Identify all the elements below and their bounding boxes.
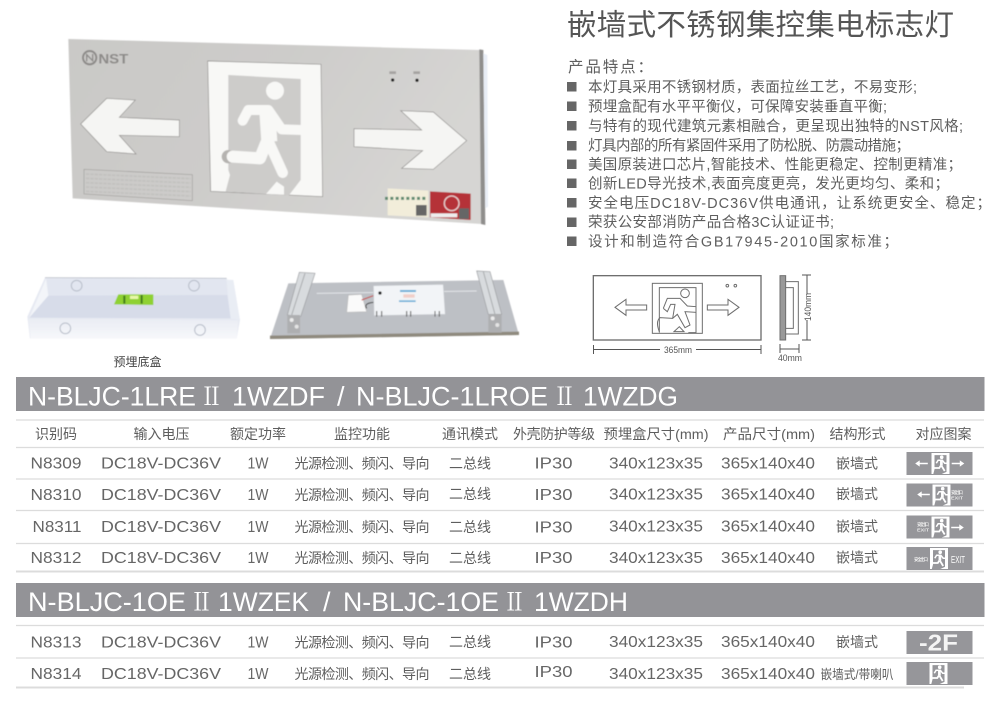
pattern icon N8311: EXIT: [917, 528, 929, 532]
row N8309: 365x140x40: [721, 456, 815, 472]
row N8313: 光源检测、频闪、导向: [294, 634, 430, 650]
row N8312: 340x123x35: [609, 550, 703, 567]
pattern icon N8310: [906, 484, 972, 506]
model header bar 2: /: [323, 587, 331, 617]
row N8309: 光源检测、频闪、导向: [294, 456, 430, 472]
row N8312: 光源检测、频闪、导向: [294, 550, 430, 566]
table header row: 预埋盒尺寸(mm): [604, 426, 708, 442]
row N8314: 365x140x40: [721, 666, 815, 683]
outline left arrow: [615, 299, 647, 315]
row N8309: [30, 452, 972, 475]
NST logo: NST: [98, 50, 129, 66]
feature 3: 与特有的现代建筑元素相融合，更呈现出独特的NST风格;: [588, 118, 963, 135]
row N8313: 1W: [248, 634, 269, 652]
indicator lights: [389, 71, 420, 82]
table header row: 外壳防护等级: [513, 426, 595, 442]
table header row: [35, 426, 972, 442]
row N8311: IP30: [534, 520, 573, 536]
row N8311: 嵌墙式: [836, 518, 878, 534]
row N8312: 嵌墙式: [836, 550, 878, 566]
pattern icon N8312: EXIT: [951, 555, 965, 566]
row N8313: DC18V-DC36V: [101, 634, 222, 652]
table header row: 对应图案: [916, 426, 972, 442]
pattern icon N8311: 安全出口: [917, 521, 930, 528]
row N8311: 365x140x40: [721, 518, 815, 536]
table header row: 输入电压: [134, 426, 190, 442]
model header bar 2: 1WZEK: [218, 587, 309, 617]
row N8312: 365x140x40: [721, 550, 815, 567]
pattern icon N8311: [906, 516, 972, 538]
feature 1: 本灯具采用不锈钢材质，表面拉丝工艺，不易变形;: [588, 79, 917, 96]
pattern icon N8310: EXIT: [951, 496, 963, 500]
model header bar 1: Ⅱ: [200, 377, 223, 413]
embedded base box photo with spirit level: [27, 278, 240, 338]
terminal block and wires: [347, 294, 373, 312]
row N8310: 340x123x35: [609, 486, 703, 504]
row N8309: IP30: [534, 456, 573, 472]
row N8312: 二总线: [449, 550, 491, 566]
row N8309: DC18V-DC36V: [101, 456, 222, 472]
model header bar 1: [16, 377, 984, 413]
model header bar 1: N-BLJC-1LROE: [356, 382, 548, 412]
row N8314: 光源检测、频闪、导向: [294, 666, 430, 682]
dimension line: 365mm width: [594, 345, 761, 356]
row N8314: DC18V-DC36V: [101, 666, 222, 683]
model header bar 2: N-BLJC-1OE: [28, 587, 186, 617]
model header bar 1: Ⅱ: [553, 377, 576, 413]
table rules: [16, 420, 984, 688]
lamp faceplate: [68, 39, 482, 224]
pattern icon N8310: 安全出口: [951, 489, 964, 496]
row N8312: 1W: [248, 550, 269, 567]
row N8311: [32, 516, 972, 538]
pattern icon: door only: [906, 662, 972, 685]
row N8311: 340x123x35: [609, 518, 703, 536]
model header bar 1: N-BLJC-1LRE: [28, 382, 196, 412]
row N8314: 二总线: [449, 666, 491, 682]
model header bar 2: N-BLJC-1OE: [343, 587, 499, 617]
row N8310: 1W: [248, 487, 269, 504]
row N8310: 嵌墙式: [836, 486, 878, 502]
row N8313: 嵌墙式: [836, 634, 878, 650]
feature 7: 安全电压DC18V-DC36V供电通讯，让系统更安全、稳定；: [588, 194, 991, 212]
row N8311: N8311: [32, 519, 82, 536]
back of lamp photo with driver module and brackets: [270, 271, 519, 339]
table header row: 监控功能: [334, 426, 390, 442]
outline right arrow: [707, 299, 739, 315]
dimension line: 140mm height: [802, 275, 814, 340]
pattern icon: -2F: [906, 630, 972, 656]
row N8309: N8309: [30, 456, 82, 472]
model header bar 1: 1WZDF: [232, 382, 325, 412]
outline exit symbol: [652, 283, 702, 333]
dimension line: 40mm depth: 40mm: [778, 353, 802, 364]
row N8313: 365x140x40: [721, 634, 815, 651]
row N8313: N8313: [30, 634, 82, 652]
row N8310: 二总线: [449, 486, 491, 502]
row N8311: 1W: [248, 519, 269, 536]
left bracket: [287, 272, 315, 333]
row N8312: [30, 547, 972, 570]
row N8313: 340x123x35: [609, 634, 703, 651]
feature 2: 预埋盒配有水平平衡仪，可保障安装垂直平衡;: [588, 98, 887, 116]
row N8313: IP30: [534, 634, 573, 652]
model header bar 2: Ⅱ: [190, 582, 213, 618]
dimension line: 365mm width: 365mm: [664, 345, 692, 356]
dimension drawing: side view: [780, 276, 798, 340]
row N8310: DC18V-DC36V: [101, 487, 222, 504]
left arrow: [81, 98, 179, 154]
right arrow: [354, 111, 467, 169]
feature 4: 灯具内部的所有紧固件采用了防松脱、防震动措施；: [588, 138, 910, 154]
row N8312: N8312: [30, 550, 82, 567]
model header bar 1: 1WZDG: [583, 382, 678, 412]
NST logo: [83, 50, 129, 66]
running man exit symbol: [208, 61, 323, 197]
row N8310: IP30: [534, 487, 573, 504]
certification stickers: [385, 188, 471, 220]
product photo: stainless steel exit sign: [68, 39, 488, 225]
table header row: 结构形式: [830, 426, 886, 442]
model header bar 2: Ⅱ: [503, 582, 526, 618]
row N8312: DC18V-DC36V: [101, 550, 222, 567]
feature 5: 美国原装进口芯片,智能技术、性能更稳定、控制更精准；: [588, 156, 962, 174]
dimension line: 140mm height: 140mm: [803, 293, 814, 321]
row N8314: IP30: [534, 664, 573, 681]
engraved specification text block: [84, 169, 192, 201]
spirit level: [114, 294, 153, 305]
model header bar 2: [16, 582, 984, 618]
features list: [567, 58, 991, 250]
pattern icon: -2F: -2F: [919, 630, 958, 656]
table header row: 通讯模式: [442, 426, 498, 442]
row N8313: [30, 630, 972, 656]
row N8312: IP30: [534, 550, 573, 567]
row N8311: 光源检测、频闪、导向: [294, 519, 430, 535]
feature 6: 创新LED导光技术,表面亮度更亮，发光更均匀、柔和；: [588, 176, 949, 192]
pattern icon N8312: 安全出口: [914, 556, 928, 563]
row N8309: 嵌墙式: [836, 456, 878, 472]
row N8311: DC18V-DC36V: [101, 519, 222, 536]
model header bar 2: 1WZDH: [534, 587, 628, 617]
dimension line: 40mm depth: [778, 344, 802, 364]
row N8314: 1W: [248, 666, 269, 683]
feature 9: 设计和制造符合GB17945-2010国家标准；: [588, 234, 898, 250]
pattern icon N8309: [906, 452, 972, 475]
row N8314: 嵌墙式/带喇叭: [820, 667, 894, 682]
table header row: 识别码: [35, 426, 77, 442]
table header row: 额定功率: [230, 426, 286, 442]
row N8309: 1W: [248, 456, 269, 472]
driver module: [373, 284, 445, 317]
features heading: 产品特点：: [568, 58, 653, 76]
row N8314: N8314: [30, 666, 82, 683]
right bracket: [477, 271, 502, 333]
row N8310: 365x140x40: [721, 486, 815, 504]
title: 嵌墙式不锈钢集控集电标志灯: [567, 9, 954, 42]
feature 8: 荣获公安部消防产品合格3C认证证书;: [588, 214, 834, 231]
row N8309: 二总线: [449, 456, 491, 472]
row N8314: 340x123x35: [609, 666, 703, 683]
row N8310: [30, 484, 972, 506]
dimension drawing: front view: [593, 276, 761, 340]
row N8311: 二总线: [449, 519, 491, 535]
model header bar 1: /: [337, 382, 345, 412]
row N8310: N8310: [30, 487, 82, 504]
pattern icon N8312: [906, 547, 972, 570]
table header row: 产品尺寸(mm): [723, 426, 815, 442]
caption: 预埋底盒: 预埋底盒: [114, 354, 162, 369]
row N8314: [30, 662, 972, 685]
row N8309: 340x123x35: [609, 456, 703, 472]
row N8310: 光源检测、频闪、导向: [294, 487, 430, 503]
row N8313: 二总线: [449, 634, 491, 650]
